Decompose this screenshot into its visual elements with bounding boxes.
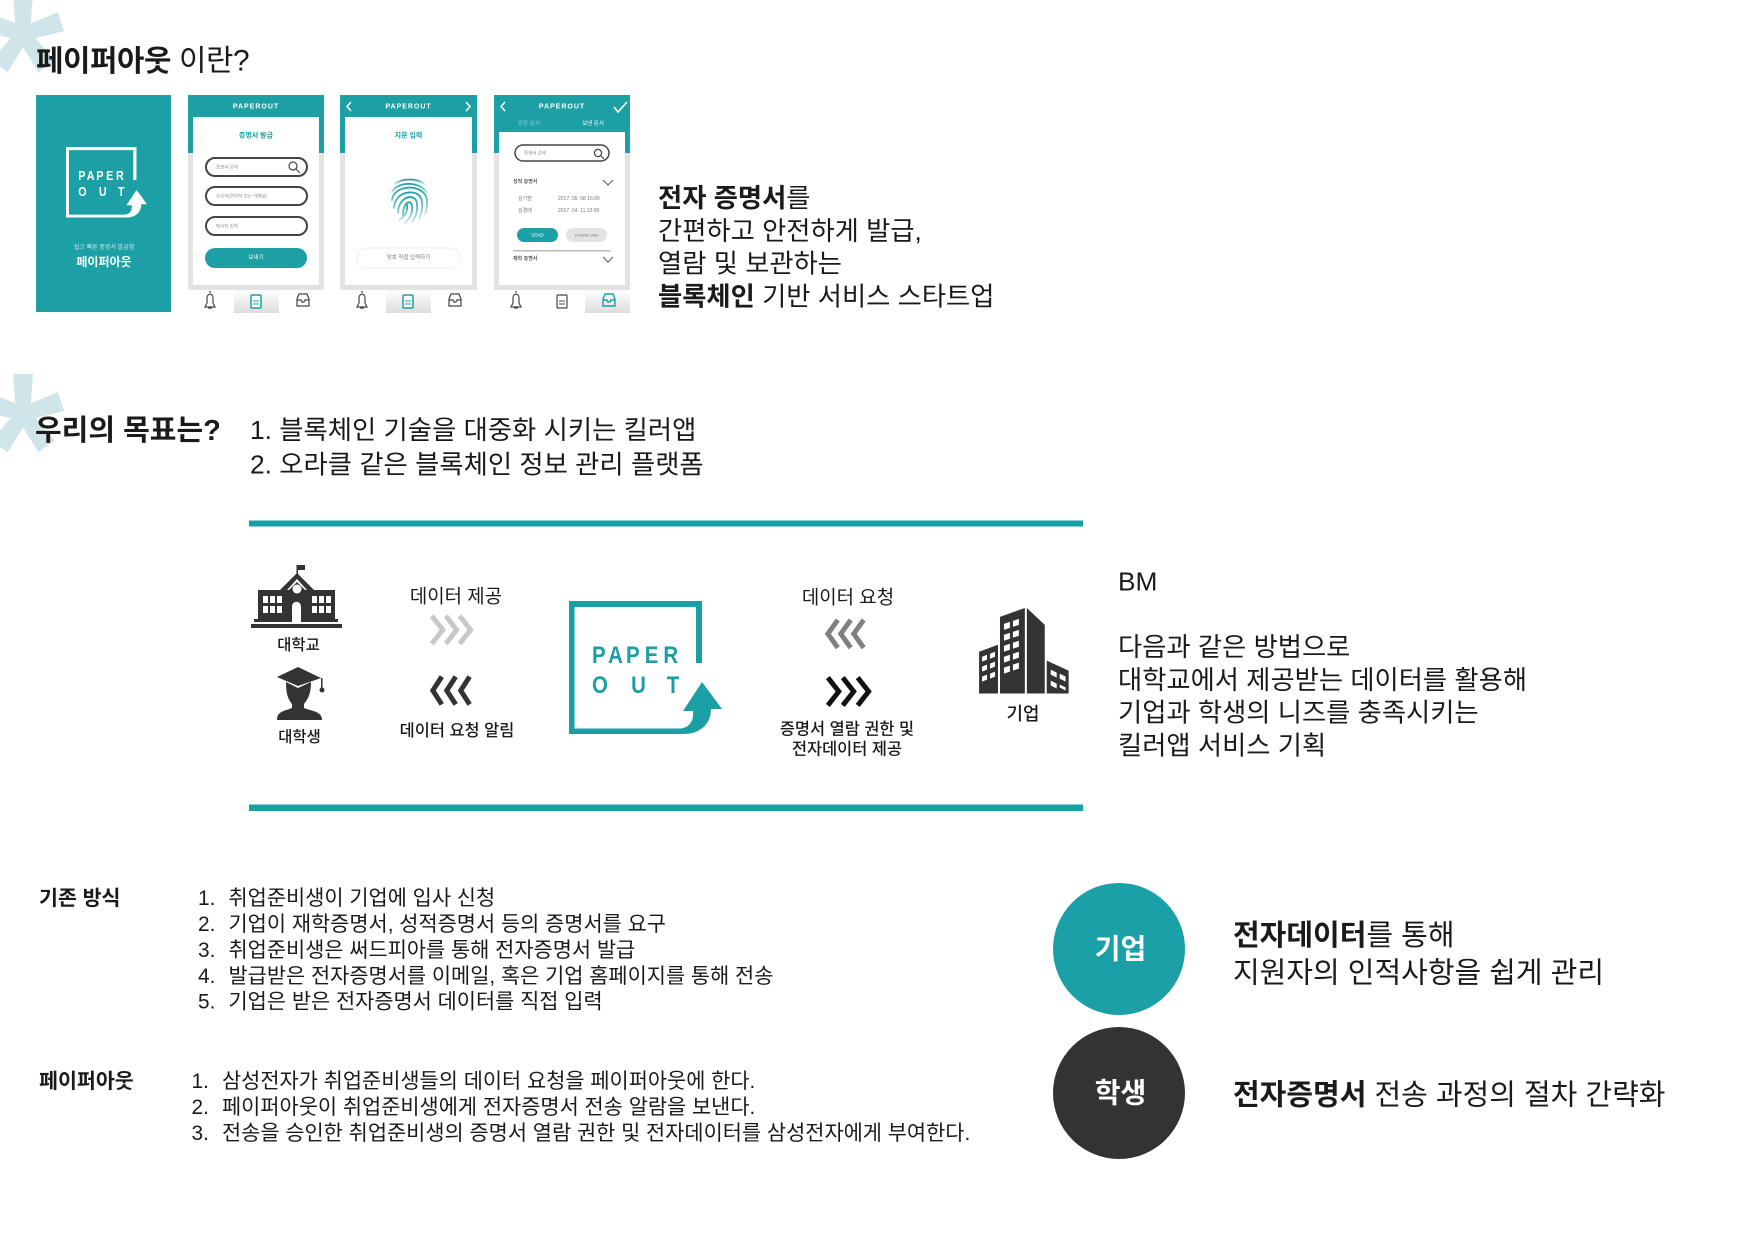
list: existing process [198, 887, 773, 1014]
download button [566, 228, 607, 242]
app screen: fingerprint [340, 95, 477, 313]
list: paperout process [192, 1070, 970, 1145]
benefit: company: 전자데이터를 통해 [1233, 919, 1455, 952]
app screen: documents: 김경태 [518, 207, 532, 214]
bottom nav [357, 290, 461, 313]
list: existing process: 5. [198, 990, 215, 1014]
enrollment certificate: 재학 증명서 [513, 255, 538, 262]
input fields [206, 158, 307, 235]
label: 증명서 열람 권한 및 전자데이터 제공: 전자데이터 제공 [792, 740, 902, 758]
badge: 기업: 기업 [1095, 934, 1146, 964]
screen heading: 지문 입력 [395, 130, 422, 140]
list: existing process: 기업은 받은 전자증명서 데이터를 직접 입력 [228, 990, 603, 1014]
list: existing process: 2. [198, 913, 215, 936]
label: 기업: 기업 [1007, 704, 1039, 724]
goals list: 2. 오라클 같은 블록체인 정보 관리 플랫폼 [250, 450, 704, 480]
BM description [1118, 566, 1527, 760]
password button [357, 248, 460, 268]
arrow: black chevrons right [828, 678, 869, 705]
icon: graduate [277, 667, 324, 720]
list: paperout process: 3. [192, 1122, 209, 1145]
grade certificate: 성적 증명서 [513, 178, 538, 185]
list: existing process: 4. [198, 965, 215, 988]
benefit: company [1233, 919, 1604, 990]
splash logo: PAPER [78, 168, 124, 183]
goals list [250, 415, 704, 480]
arrow: light chevrons right [432, 616, 471, 644]
intro description [658, 183, 994, 312]
app screen: certificate issue [188, 95, 324, 313]
label: 데이터 제공: 데이터 제공 [410, 586, 502, 608]
BM description: 킬러앱 서비스 기획 [1118, 730, 1326, 760]
icon: university [251, 565, 342, 628]
input fields: 메시지 입력 [216, 222, 238, 230]
list: existing process: 발급받은 전자증명서를 이메일, 혹은 기업 홈페이지를 통해 전송 [228, 965, 773, 988]
BM description: 기업과 학생의 니즈를 충족시키는 [1118, 698, 1479, 728]
app screen: documents: 보낸 문서 [582, 119, 604, 127]
app screen: documents: 김기범 [518, 195, 532, 202]
screen heading: 증명서 발급 [239, 130, 274, 140]
list: paperout process: 삼성전자가 취업준비생들의 데이터 요청을 페이퍼아웃에 한다. [222, 1070, 755, 1093]
icon: fingerprint [392, 180, 427, 223]
decoration: asterisk top [0, 0, 64, 72]
app screen: documents: 증명서 검색 [524, 150, 546, 156]
logo: paper out [569, 601, 722, 734]
app screen: documents: 2017. 05. 08 16:00 [558, 196, 600, 202]
header: PAPEROUT [539, 104, 585, 110]
label: 증명서 열람 권한 및 전자데이터 제공 [780, 720, 914, 758]
intro description: 간편하고 안전하게 발급, [658, 216, 922, 246]
label: 증명서 열람 권한 및 전자데이터 제공: 증명서 열람 권한 및 [780, 720, 914, 738]
logo: paper out: OUT [592, 672, 680, 698]
decoration: asterisk middle [0, 374, 64, 452]
badge: 학생 [1053, 1027, 1185, 1159]
input fields: 수신자(연락처 또는 이메일) [216, 192, 268, 200]
header: PAPEROUT [233, 104, 279, 110]
benefit: company: 지원자의 인적사항을 쉽게 관리 [1233, 958, 1604, 990]
heading: 페이퍼아웃: 페이퍼아웃 [39, 1070, 134, 1093]
title: 페이퍼아웃 이란?: 페이퍼아웃 이란? [36, 44, 249, 78]
label: 데이터 요청 알림: 데이터 요청 알림 [400, 722, 514, 740]
intro description: 블록체인 기반 서비스 스타트업 [658, 282, 994, 312]
logo: paper out: PAPER [592, 642, 678, 668]
app screen: documents: 2017. 04. 11 13:00 [558, 208, 600, 214]
badge: 기업 [1053, 883, 1185, 1015]
heading: 우리의 목표는?: 우리의 목표는? [35, 414, 221, 447]
arrow: grey chevrons left [828, 620, 864, 648]
input fields: 증명서 검색 [216, 164, 238, 170]
intro description: 전자 증명서를 [658, 183, 810, 213]
list: paperout process: 전송을 승인한 취업준비생의 증명서 열람 권한 및 전자데이터를 삼성전자에게 부여한다. [222, 1122, 970, 1145]
badge: 학생: 학생 [1095, 1078, 1146, 1108]
arrow: dark chevrons left [433, 677, 470, 704]
BM description: 다음과 같은 방법으로 [1118, 632, 1350, 662]
tabs: 받은 문서 [518, 119, 540, 127]
list: existing process: 1. [198, 887, 215, 910]
heading: 기존 방식: 기존 방식 [39, 887, 121, 910]
list: paperout process: 2. [192, 1096, 209, 1119]
list: paperout process: 1. [192, 1070, 209, 1093]
splash name: 페이퍼아웃 [76, 255, 132, 269]
app screen: certificate issue: 보내기 [248, 253, 264, 261]
app screen: documents: DOWNLOAD [575, 232, 598, 238]
list: existing process: 취업준비생이 기업에 입사 신청 [228, 887, 495, 910]
send button [517, 228, 558, 242]
icon: company buildings [979, 608, 1069, 694]
search field [515, 145, 609, 161]
header: PAPEROUT [385, 104, 432, 110]
app screen: splash [36, 95, 171, 312]
bottom nav [205, 290, 309, 313]
label: 대학생: 대학생 [278, 728, 321, 746]
goals list: 1. 블록체인 기술을 대중화 시키는 킬러앱 [250, 415, 696, 445]
app screen: documents: SEND [531, 232, 544, 238]
list: existing process: 기업이 재학증명서, 성적증명서 등의 증명서를 요구 [228, 913, 666, 936]
list: paperout process: 페이퍼아웃이 취업준비생에게 전자증명서 전송 알람을 보낸다. [222, 1096, 755, 1119]
bottom nav [511, 290, 630, 313]
list: existing process: 취업준비생은 써드피아를 통해 전자증명서 발급 [228, 939, 635, 962]
label: 대학교: 대학교 [277, 636, 320, 654]
splash logo [66, 147, 147, 217]
BM description: 대학교에서 제공받는 데이터를 활용해 [1118, 665, 1527, 695]
benefit: student: 전자증명서 전송 과정의 절차 간략화 [1233, 1078, 1665, 1112]
app screen: fingerprint: 암호 직접 입력하기 [387, 253, 430, 261]
splash caption: 쉽고 빠른 증명서 발급앱 [74, 243, 134, 251]
label: 데이터 요청: 데이터 요청 [802, 586, 894, 608]
app screen: documents [494, 95, 630, 313]
send button [205, 248, 307, 268]
splash logo: OUT [78, 184, 125, 199]
intro description: 열람 및 보관하는 [658, 248, 842, 278]
BM description: BM [1118, 566, 1157, 596]
list: existing process: 3. [198, 939, 215, 962]
